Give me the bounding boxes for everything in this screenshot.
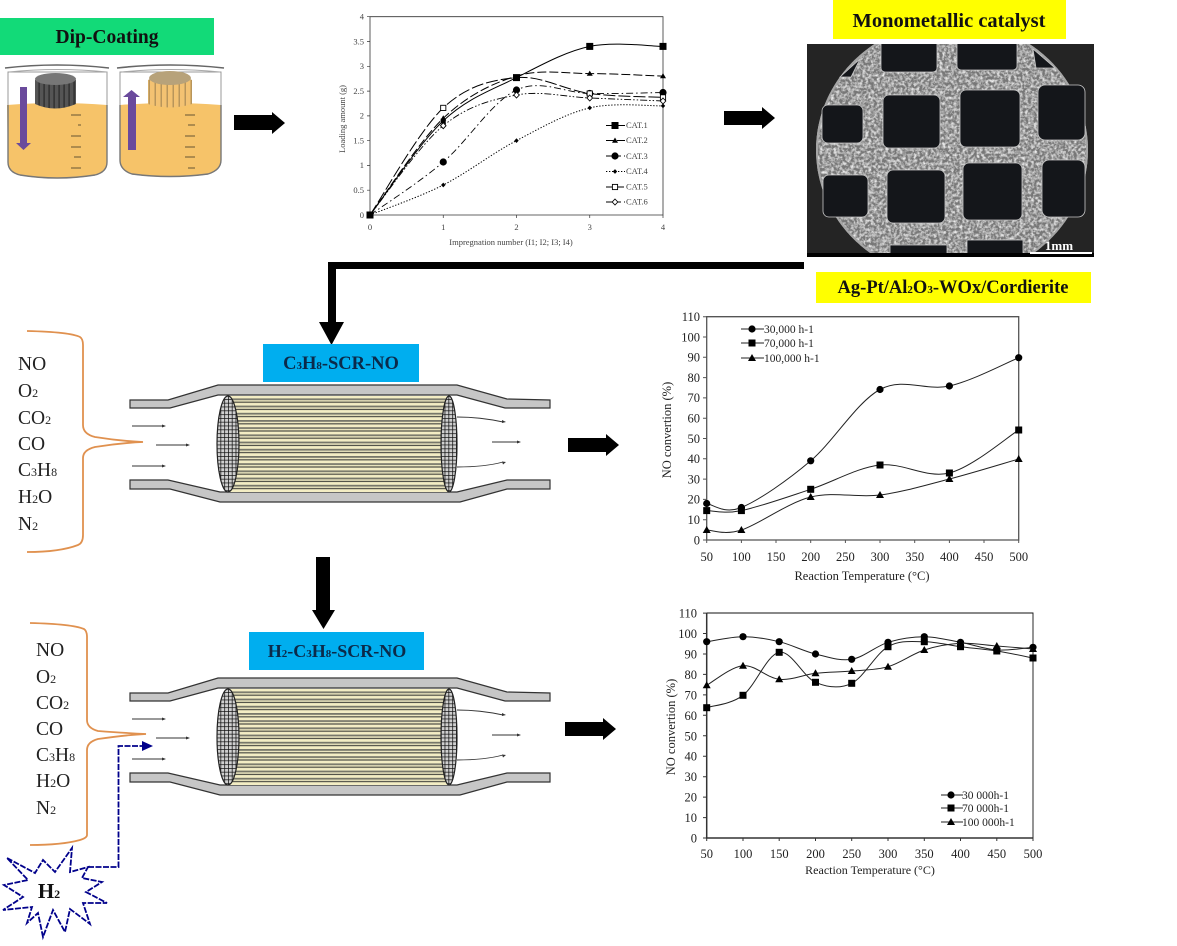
legend: [606, 120, 649, 206]
x axis tick labels: 150: [767, 550, 785, 564]
y axis tick labels: 90: [684, 648, 697, 662]
y axis tick labels: 60: [684, 709, 697, 723]
y axis tick labels: 40: [688, 452, 700, 466]
series: CAT.6: [370, 92, 666, 215]
y axis tick labels: 10: [684, 811, 697, 825]
y axis tick labels: 70: [684, 688, 697, 702]
y axis tick labels: 0.5: [353, 185, 364, 195]
legend: 100 000h-1: [962, 817, 1015, 829]
chart: loading amount vs impregnation number: [337, 12, 667, 247]
y axis title: Loading amount (g): [337, 85, 347, 153]
arrow: reactor to conversion chart: [568, 434, 619, 456]
x axis tick labels: 300: [871, 550, 889, 564]
series: CAT.1: [366, 43, 666, 219]
legend: CAT.6: [626, 196, 648, 206]
y axis tick labels: 80: [684, 668, 697, 682]
x axis tick labels: 100: [732, 550, 751, 564]
y axis tick labels: [681, 310, 700, 547]
label: H2-C3H8-SCR-NO: [249, 632, 424, 670]
x axis tick labels: 0: [368, 222, 372, 232]
y axis tick labels: 30: [688, 472, 700, 486]
y axis tick labels: 1: [360, 160, 364, 170]
scale bar: [1030, 238, 1092, 254]
y axis tick labels: [678, 606, 697, 846]
label: Dip-Coating: [0, 18, 214, 55]
arrow: H2 reactor to conversion chart: [565, 718, 616, 740]
legend: CAT.3: [626, 151, 648, 161]
y axis tick labels: 50: [688, 432, 700, 446]
gas list: second reactor: NO: [36, 640, 64, 661]
y axis tick labels: 50: [684, 729, 697, 743]
gas feed bracket: second reactor: [30, 623, 146, 845]
gas list: first reactor: C3H8: [18, 460, 57, 481]
series: CAT.4: [370, 104, 665, 215]
x axis tick labels: [700, 550, 1028, 564]
x axis tick labels: 3: [588, 222, 592, 232]
x axis tick labels: 200: [801, 550, 820, 564]
y axis tick labels: 60: [688, 412, 700, 426]
arrow: H2 dosing line: [88, 741, 153, 867]
y axis tick labels: 20: [684, 791, 697, 805]
y axis tick labels: 3: [360, 61, 364, 71]
x axis tick labels: 2: [514, 222, 519, 232]
x axis tick labels: 500: [1024, 847, 1042, 861]
label: H2-C3H8-SCR-NO: H2-C3H8-SCR-NO: [268, 641, 406, 661]
x axis tick labels: 400: [940, 550, 959, 564]
x axis tick labels: 1: [441, 222, 445, 232]
y axis tick labels: 110: [679, 606, 697, 620]
reactor: monolith in housing (H2-C3H8-SCR): [130, 678, 550, 795]
y axis tick labels: 2.5: [353, 86, 364, 96]
x axis tick labels: 350: [915, 847, 934, 861]
x axis tick labels: 450: [987, 847, 1006, 861]
y axis tick labels: 90: [688, 351, 700, 365]
x axis tick labels: 100: [734, 847, 752, 861]
y axis title: NO convertion (%): [664, 679, 678, 775]
series: CAT.5: [370, 77, 666, 215]
legend: CAT.4: [626, 166, 649, 176]
label: Monometallic catalyst: [833, 0, 1066, 39]
icon: beaker with dark monolith dipped down: [5, 65, 109, 178]
label: Dip-Coating: Dip-Coating: [56, 27, 159, 48]
y axis tick labels: 80: [688, 371, 700, 385]
x axis tick labels: [368, 222, 666, 232]
y axis tick labels: 70: [688, 391, 700, 405]
x axis tick labels: 200: [806, 847, 825, 861]
arrow: down to H2 assisted reactor: [312, 557, 335, 629]
series: 100 000 h-1: [703, 639, 1037, 688]
y axis tick labels: 3.5: [353, 36, 364, 46]
label: Ag-Pt/Al2O3-WOx/Cordierite: Ag-Pt/Al2O3-WOx/Cordierite: [838, 278, 1068, 298]
gas list: first reactor: O2: [18, 381, 38, 402]
legend: 30,000 h-1: [764, 324, 814, 336]
legend: CAT.2: [626, 135, 648, 145]
y axis tick labels: 2: [360, 111, 364, 121]
legend: [741, 324, 820, 365]
gas list: second reactor: O2: [36, 667, 56, 688]
x axis tick labels: 150: [770, 847, 789, 861]
gas list: second reactor: CO: [36, 719, 63, 740]
chart: NO conversion with H2: [664, 606, 1042, 877]
y axis tick labels: 0: [694, 533, 700, 547]
icon: beaker with coated monolith lifted up: [117, 65, 224, 176]
series: CAT.2: [370, 71, 666, 215]
x axis tick labels: 250: [842, 847, 861, 861]
series: 70 000 h-1: [703, 638, 1036, 711]
x axis tick labels: 50: [700, 847, 713, 861]
y axis tick labels: 10: [688, 513, 700, 527]
y axis tick labels: 30: [684, 770, 697, 784]
y axis tick labels: 100: [678, 627, 697, 641]
x axis tick labels: [700, 847, 1042, 861]
series: 70,000 h-1: [703, 426, 1022, 514]
gas feed bracket: first reactor: [27, 331, 143, 552]
gas list: second reactor: CO2: [36, 693, 69, 714]
legend: 100,000 h-1: [764, 353, 820, 365]
series: 100,000 h-1: [703, 455, 1023, 533]
x axis tick labels: 400: [951, 847, 970, 861]
gas list: first reactor: NO: [18, 354, 46, 375]
chart: NO conversion without H2: [660, 310, 1028, 583]
icon: H2 starburst: [3, 848, 107, 937]
label: Monometallic catalyst: Monometallic catalyst: [852, 10, 1046, 32]
gas list: first reactor: CO2: [18, 408, 51, 429]
x axis title: Reaction Temperature (°C): [794, 569, 930, 583]
y axis tick labels: [353, 12, 365, 220]
scale bar: 1mm: [1045, 238, 1073, 253]
gas list: first reactor: N2: [18, 514, 38, 535]
y axis tick labels: 40: [684, 750, 697, 764]
legend: CAT.5: [626, 182, 648, 192]
x axis title: Reaction Temperature (°C): [805, 863, 935, 877]
x axis tick labels: 300: [879, 847, 897, 861]
gas list: first reactor: [18, 354, 57, 535]
y axis title: NO convertion (%): [660, 382, 674, 478]
gas list: first reactor: CO: [18, 434, 45, 455]
gas list: second reactor: N2: [36, 798, 56, 819]
gas list: second reactor: C3H8: [36, 745, 75, 766]
y axis tick labels: 0: [691, 832, 697, 846]
x axis tick labels: 450: [975, 550, 993, 564]
connector arrow: catalyst to reactor: [319, 262, 804, 345]
label: Ag-Pt/Al2O3-WOx/Cordierite: [816, 272, 1091, 303]
arrow: loading chart to catalyst image: [724, 107, 775, 129]
legend: 30 000h-1: [962, 790, 1009, 802]
x axis tick labels: 50: [700, 550, 713, 564]
series: CAT.3: [370, 86, 667, 215]
arrow: dip coating to loading chart: [234, 112, 285, 134]
series: 30,000 h-1: [703, 354, 1022, 511]
y axis tick labels: 1.5: [353, 136, 364, 146]
legend: 70 000h-1: [962, 803, 1009, 815]
image: SEM micrograph of catalyst monolith: [807, 44, 1094, 257]
legend: [941, 790, 1015, 829]
x axis tick labels: 350: [905, 550, 924, 564]
x axis title: Impregnation number (I1; I2; I3; I4): [449, 237, 573, 247]
gas list: first reactor: H2O: [18, 487, 52, 508]
y axis tick labels: 4: [360, 12, 365, 22]
legend: CAT.1: [626, 120, 648, 130]
x axis tick labels: 4: [661, 222, 666, 232]
x axis tick labels: 250: [836, 550, 855, 564]
reactor: monolith in housing (C3H8-SCR): [130, 385, 550, 502]
mesh holes: [822, 40, 1085, 259]
y axis tick labels: 20: [688, 493, 700, 507]
label: C3H8-SCR-NO: C3H8-SCR-NO: [283, 354, 399, 374]
series: 30 000 h-1: [703, 633, 1037, 663]
icon: H2 starburst: H2: [38, 879, 60, 903]
gas list: second reactor: [36, 640, 75, 819]
gas list: second reactor: H2O: [36, 771, 70, 792]
legend: 70,000 h-1: [764, 338, 814, 350]
y axis tick labels: 110: [682, 310, 700, 324]
y axis tick labels: 100: [681, 330, 700, 344]
label: C3H8-SCR-NO: [263, 344, 419, 382]
x axis tick labels: 500: [1009, 550, 1028, 564]
y axis tick labels: 0: [360, 210, 364, 220]
